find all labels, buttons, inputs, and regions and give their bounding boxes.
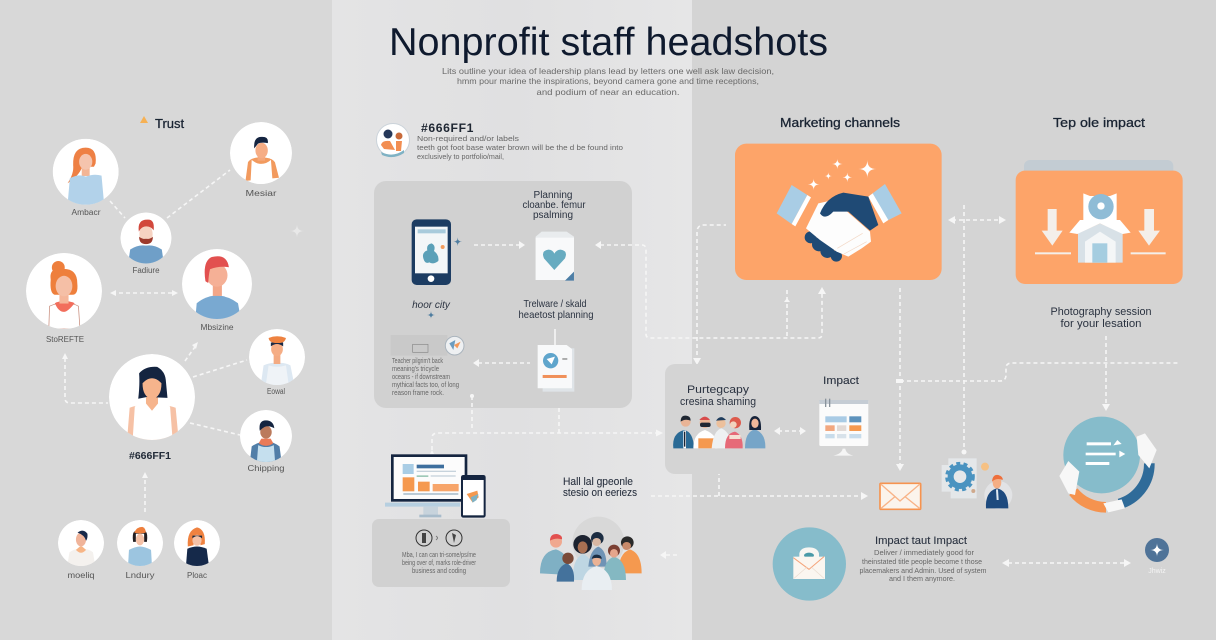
icon: smartphone [412,219,462,285]
icon: document [538,345,574,392]
double arrow [1002,559,1131,567]
icon: email circle [773,527,846,601]
note text: Teacher pilgrim't back [392,356,443,365]
person: woman with orange bun [26,253,102,329]
person: man with orange cap [249,329,305,385]
heading and text: impact: Deliver / immediately good for [874,548,974,557]
label: city [412,300,451,319]
subtitle text: and podium of near an education. [536,87,680,97]
person: dark skinned person [240,410,292,462]
label: photography session: for your lesation [1060,318,1142,330]
label: purtogcapy: cresina shaming [680,396,756,408]
arrow from right [600,245,822,338]
label: photography session [1050,306,1152,330]
icon: gear and person [942,458,1012,509]
person: bottom left [58,520,104,566]
subtitle text: hmm pour marine the inspirations, beyond camera gone and time receptions, [457,76,759,86]
label: planning [522,190,586,221]
connectors: middle lower [430,205,1180,559]
label: purtogcapy [680,384,756,408]
label: purtogcapy: Purtegcapy [687,384,750,396]
sparkle icon [290,224,304,238]
label: heartfelt planning [518,298,594,321]
arrowheads [595,241,826,294]
icon: envelope [880,483,921,509]
double arrow [774,427,806,435]
note text: mythical facts too, of long [392,380,459,389]
illustration: crowd of people [540,517,642,590]
heading and text: impact: placemakers and Admin. Used of system [860,566,986,575]
heading and text: impact: Impact taut Impact [875,535,967,547]
label: photography session: Photography session [1050,306,1152,318]
panel: devices caption: business and coding [412,566,466,575]
heading: trust [140,116,185,131]
label: Ploac [187,571,207,580]
panel: devices caption: Mba, I can can tri-some/ps/me [402,550,476,559]
person: bottom right [174,520,220,566]
icon: arrows [1035,209,1166,254]
icon: building [1069,193,1131,263]
icon: add button: Jhwiz [1148,568,1166,575]
heading: impact: Impact [823,375,859,387]
heading and text: impact: theinstated title people become t those [862,557,982,566]
label: Lndury [126,571,154,580]
panel: devices caption [372,519,510,587]
heading and text: impact: and I them anymore. [889,574,955,583]
intro block with avatar [376,121,623,161]
label: Ambacr [72,208,101,217]
label: Mbsizine [200,323,234,332]
description: teeth got foot base water brown will be the d be found into [417,143,623,152]
panel: portrait planning [665,364,745,474]
icon: avatar [376,124,410,157]
label: Mesiar [246,189,277,198]
person: bottom centre [117,520,163,566]
person: man with red hair [182,249,252,319]
icon: add button [1145,538,1169,575]
description [417,134,623,161]
arrow [478,362,530,364]
label: #666FF1: #666FF1 [129,451,171,462]
label: planning: psalming [533,210,573,221]
icon: calendar [819,399,868,456]
heading: trust: Trust [155,116,185,131]
label: Fadiure [132,266,160,275]
heading: marketing channels: Marketing channels [780,116,900,130]
note card [391,335,464,356]
label: hall gpeonle [563,476,637,499]
person: man with dark hair [230,122,292,184]
label: hall gpeonle: stesio on eeriezs [563,487,637,499]
title: Nonprofit staff headshots [389,21,828,64]
arrow [474,244,522,246]
left panel connectors [62,170,247,512]
connector stub [554,329,556,345]
person: central woman [109,354,195,440]
label: planning: cloanbe. femur [522,200,586,211]
arrowhead [473,359,479,367]
description: Non-required and/or labels [417,134,519,143]
person: bearded man [120,212,172,264]
heading: top role impact: Tep ole impact [1053,116,1146,130]
label: moeliq [68,571,94,580]
note text: oceans - if downstream [392,372,450,381]
label: Chipping [248,464,284,473]
heading and text: impact [860,535,986,583]
icon: cycle chart [1059,417,1157,512]
arrowhead [519,241,525,249]
label: heartfelt planning: heaetost planning [518,309,594,321]
heading: #666FF1 [421,121,474,135]
label: StoREFTE [46,335,84,344]
label: planning: Planning [534,190,572,201]
note text: reason frame rock. [392,388,444,397]
icon: heart document [536,232,574,281]
note text: meaning's tricycle [392,364,439,373]
panel: planning [374,181,826,408]
subtitle text [442,66,774,97]
note text [392,356,459,397]
label: Eowal [267,387,285,396]
description: exclusively to portfolio/mail, [417,152,504,161]
label: heartfelt planning: Trelware / skald [524,298,587,310]
panel: devices caption: being over of, marks role-driver [402,558,476,567]
panel: top role impact card [1016,160,1183,284]
panel: handshake card [735,144,942,280]
label: city: hoor city [412,300,451,311]
subtitle text: Lits outline your idea of leadership plans lead by letters one well ask law decision, [442,66,774,76]
sparkles [808,159,876,190]
person: woman with long orange hair [53,139,119,205]
icon: team of five [673,416,765,448]
icon: handshake [777,184,902,262]
label: hall gpeonle: Hall lal gpeonle [563,476,633,488]
devices illustration [385,454,486,518]
